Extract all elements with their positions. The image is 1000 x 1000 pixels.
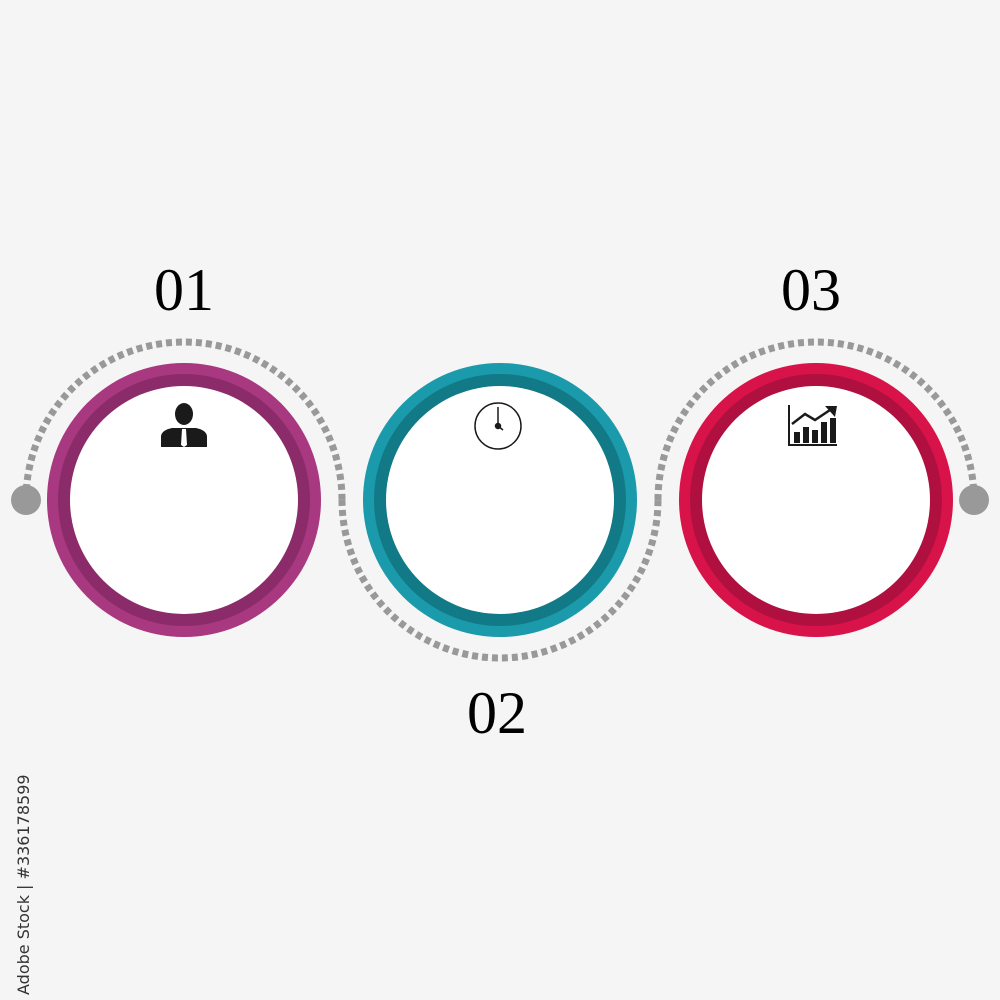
- label 03: 03: [781, 257, 841, 323]
- endpoint dot left: [11, 485, 41, 515]
- watermark id text: Adobe Stock | #336178599: [14, 774, 33, 995]
- icon: person: [161, 403, 207, 447]
- icon: clock: [475, 403, 521, 449]
- endpoint dot right: [959, 485, 989, 515]
- icon: growth chart: [788, 405, 837, 446]
- step 1 ring: [47, 363, 321, 637]
- label 01: 01: [154, 257, 214, 323]
- step 3 ring: [679, 363, 953, 637]
- dashed connector path: [26, 342, 974, 658]
- label 02: 02: [467, 680, 527, 746]
- step 2 ring: [363, 363, 637, 637]
